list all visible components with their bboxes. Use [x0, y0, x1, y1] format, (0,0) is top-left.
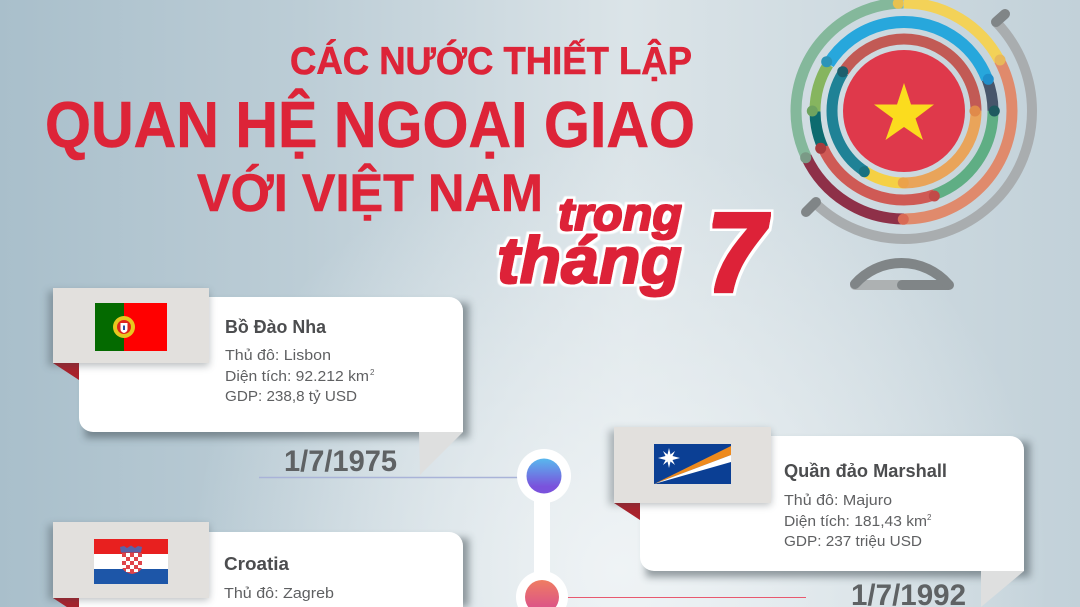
subtitle: trong tháng 7: tháng: [497, 223, 682, 297]
subtitle: trong tháng 7: 7: [707, 190, 769, 315]
inner ring: [804, 11, 1004, 211]
outer ring: [796, 3, 1012, 219]
country facts: Diện tích: 92.212 km: [225, 368, 369, 385]
country facts: [225, 347, 375, 405]
middle ring: [781, 0, 1027, 234]
subtitle: trong tháng 7: trong: [558, 188, 682, 240]
flag: Marshall Islands: [654, 444, 731, 484]
country facts: Thủ đô: Lisbon: [225, 347, 331, 364]
country facts: [784, 492, 932, 550]
panel: Portugal: [48, 288, 469, 478]
ring joints: [800, 0, 1006, 225]
country facts: Diện tích: 181,43 km: [784, 513, 927, 530]
date: 1/7/1975: [284, 445, 397, 478]
flag: Croatia: [94, 539, 168, 584]
flag: Portugal: [95, 303, 167, 351]
timeline node 1975: [517, 449, 571, 503]
title: VỚI VIỆT NAM: [197, 162, 543, 223]
title: [45, 39, 695, 223]
country facts: Thủ đô: Majuro: [784, 492, 892, 509]
flag disc and star: [843, 50, 965, 172]
panel: Croatia: [48, 522, 469, 607]
panel: Marshall Islands: [609, 427, 1030, 607]
subtitle: trong tháng 7: [497, 188, 769, 315]
country name: Bồ Đào Nha: [225, 317, 327, 337]
country facts: [224, 585, 370, 607]
title: CÁC NƯỚC THIẾT LẬP: [290, 39, 692, 83]
icon: globe with Vietnamese flag: [776, 0, 1032, 285]
globe stand: [776, 0, 1032, 285]
country name: Quần đảo Marshall: [784, 461, 947, 481]
timeline node 1992: [516, 571, 568, 607]
country facts: Thủ đô: Zagreb: [224, 585, 334, 602]
country facts: GDP: 237 triệu USD: [784, 533, 922, 550]
country name: Croatia: [224, 554, 290, 574]
country facts: GDP: 238,8 tỷ USD: [225, 388, 357, 405]
title: QUAN HỆ NGOẠI GIAO: [45, 88, 695, 161]
country facts: 2: [370, 368, 375, 377]
timeline connector: [259, 478, 806, 598]
country facts: 2: [927, 513, 932, 522]
